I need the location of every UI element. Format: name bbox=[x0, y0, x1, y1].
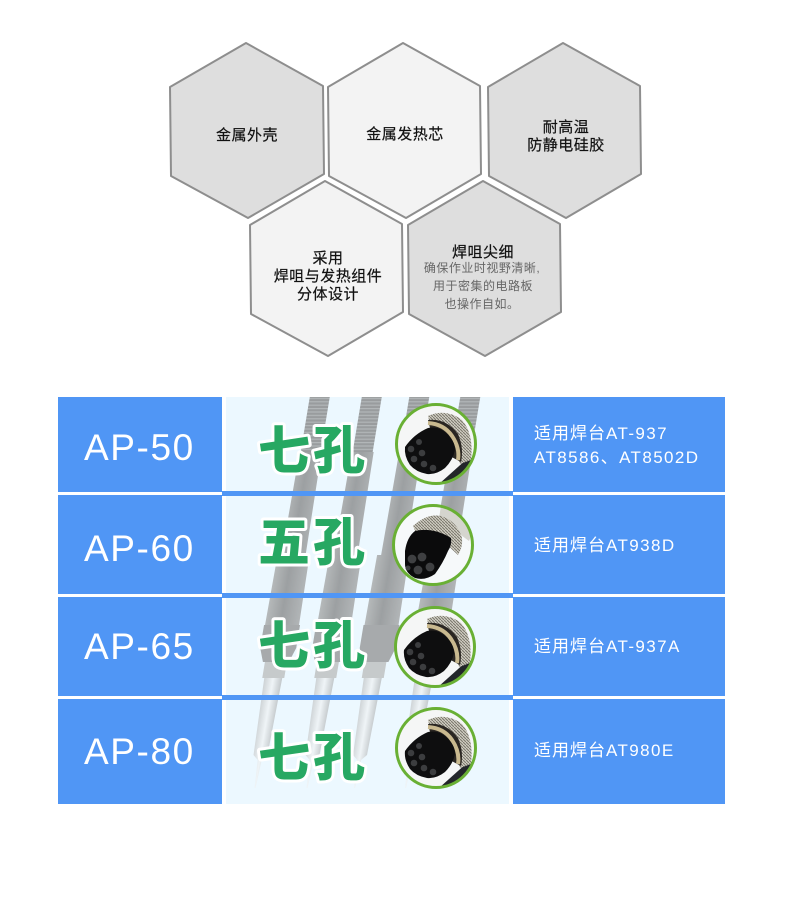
hexagon: 金属外壳 bbox=[170, 43, 324, 218]
panel: model label column bbox=[58, 397, 222, 804]
row dividers bbox=[222, 491, 513, 700]
hexagon: 金属发热芯: 金属发热芯 bbox=[366, 126, 444, 143]
row AP-65: 七孔 bbox=[258, 604, 479, 691]
hexagon: 焊咀尖细: 焊咀尖细 bbox=[452, 244, 514, 261]
row AP-60: 五孔: 五孔 bbox=[258, 501, 368, 576]
panel: model label column: AP-50 bbox=[84, 427, 195, 468]
panel: soldering iron image background bbox=[226, 397, 509, 804]
hexagon: 焊咀尖细: 也操作自如。 bbox=[444, 296, 520, 311]
image: four soldering irons bbox=[254, 397, 480, 788]
hexagon: 耐高温防静电硅胶: 耐高温 bbox=[543, 119, 589, 136]
hexagon: 采用焊咀与发热组件分体设计: 采用 bbox=[312, 250, 344, 267]
panel: compatible stations column: 适用焊台AT-937A bbox=[534, 637, 681, 656]
hexagon: 焊咀尖细: 用于密集的电路板 bbox=[433, 278, 533, 293]
row AP-65: 七孔: 七孔 bbox=[258, 604, 368, 679]
hexagon: 焊咀尖细: 确保作业时视野清晰, bbox=[424, 260, 540, 275]
panel: model label column: AP-60 bbox=[84, 528, 195, 569]
hexagon: 焊咀尖细 bbox=[408, 181, 561, 356]
row AP-80: 七孔: 七孔 bbox=[258, 716, 368, 791]
panel: compatible stations column: 适用焊台AT938D bbox=[534, 536, 676, 555]
hexagon: 金属外壳: 金属外壳 bbox=[216, 127, 278, 144]
row AP-50: 七孔: 七孔 bbox=[258, 409, 368, 484]
panel: compatible stations column: 适用焊台AT-937 bbox=[534, 424, 668, 443]
hexagon: 采用焊咀与发热组件分体设计: 分体设计 bbox=[297, 286, 359, 303]
hexagon: 采用焊咀与发热组件分体设计: 焊咀与发热组件 bbox=[274, 268, 382, 285]
hexagon: 金属发热芯 bbox=[328, 43, 481, 218]
hexagon: 耐高温防静电硅胶: 防静电硅胶 bbox=[527, 137, 605, 154]
hexagon: 采用焊咀与发热组件分体设计 bbox=[250, 181, 403, 356]
panel: model label column: AP-80 bbox=[84, 731, 195, 772]
row AP-60: 五孔 bbox=[258, 501, 477, 585]
panel: compatible stations column: AT8586、AT8502D bbox=[534, 448, 699, 467]
row AP-50: 七孔 bbox=[258, 404, 480, 488]
hexagon: 耐高温防静电硅胶 bbox=[488, 43, 641, 218]
panel: compatible stations column: 适用焊台AT980E bbox=[534, 741, 675, 760]
panel: model label column: AP-65 bbox=[84, 626, 195, 667]
panel: compatible stations column bbox=[513, 397, 725, 804]
row AP-80: 七孔 bbox=[258, 708, 480, 792]
